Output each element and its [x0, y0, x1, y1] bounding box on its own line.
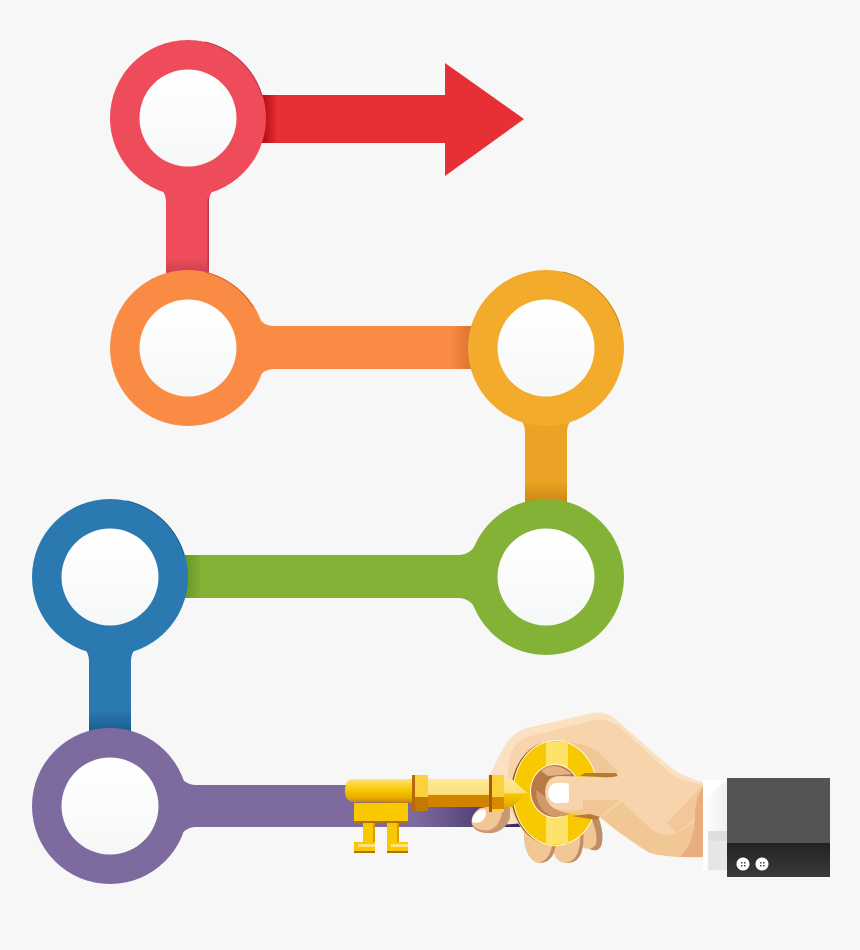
node: blue: [32, 499, 188, 655]
icon: hand back: [488, 713, 703, 857]
icon: lower fingers: [524, 815, 602, 863]
connector: orange to amber: [255, 310, 480, 386]
key ring: [511, 740, 598, 846]
connector: amber vertical: [508, 412, 584, 515]
connector: purple to key: [176, 768, 525, 845]
icon: key: [345, 740, 598, 853]
red arrow: [255, 63, 524, 176]
connector: blue vertical: [72, 641, 148, 745]
key collar right: [489, 775, 504, 812]
node: amber: [468, 270, 624, 426]
node: red: [110, 40, 266, 196]
connector: blue to green: [180, 540, 478, 614]
node: orange: [110, 270, 266, 426]
key collar left: [412, 775, 428, 811]
icon: sleeve and shirt cuff: [703, 778, 830, 877]
node: green: [468, 499, 624, 655]
icon: thumb: [472, 805, 510, 833]
key shaft: [345, 779, 527, 807]
icon: index finger: [545, 772, 625, 820]
connector: red vertical: [150, 182, 225, 285]
key teeth: [354, 803, 408, 853]
node: purple: [32, 728, 188, 884]
